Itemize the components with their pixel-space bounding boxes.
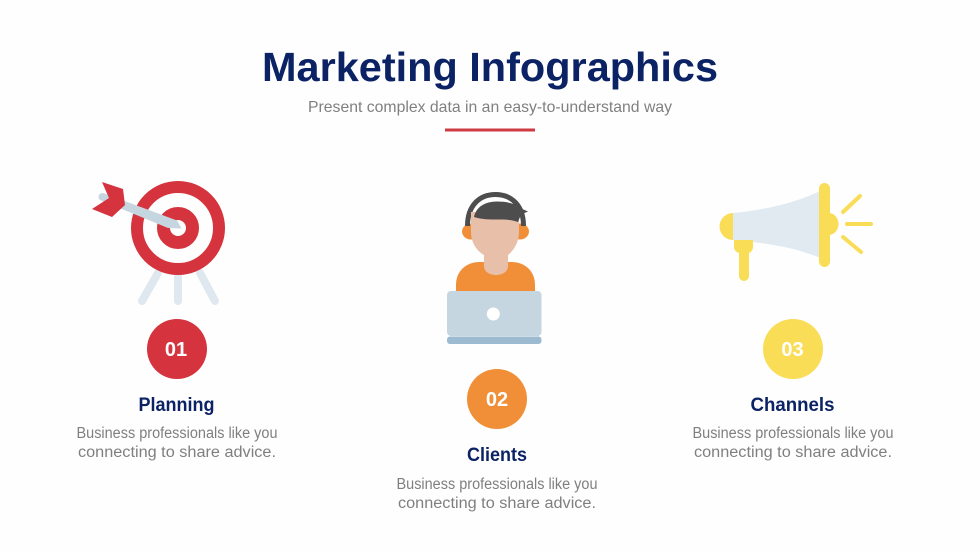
body text: Business professionals like you: [692, 425, 894, 442]
number badge 01: 01: [165, 339, 187, 361]
number badge 01: [147, 319, 207, 379]
panel: clients: [396, 194, 598, 512]
body text: connecting to share advice.: [398, 495, 596, 512]
panel: channels: [692, 183, 894, 461]
panel: planning: [76, 182, 278, 461]
icon: person with laptop: [447, 194, 542, 344]
accent underline: [445, 128, 535, 132]
body text: [692, 425, 894, 461]
heading: Channels: Channels: [750, 395, 834, 416]
icon: target with arrow: [92, 182, 219, 301]
body text: connecting to share advice.: [694, 444, 892, 461]
body text: Business professionals like you: [76, 425, 278, 442]
number badge 02: 02: [486, 389, 508, 411]
subtitle: Present complex data in an easy-to-understand way: [308, 99, 672, 116]
body text: [396, 476, 598, 512]
body text: connecting to share advice.: [78, 444, 276, 461]
number badge 03: 03: [781, 339, 804, 361]
body text: Business professionals like you: [396, 476, 598, 493]
heading: Clients: Clients: [467, 445, 527, 466]
number badge 03: [763, 319, 823, 379]
number badge 02: [467, 369, 527, 429]
header: [262, 44, 718, 132]
title: Marketing Infographics: [262, 44, 718, 90]
heading: Planning: Planning: [138, 395, 214, 416]
body text: [76, 425, 278, 461]
icon: megaphone: [720, 183, 871, 281]
